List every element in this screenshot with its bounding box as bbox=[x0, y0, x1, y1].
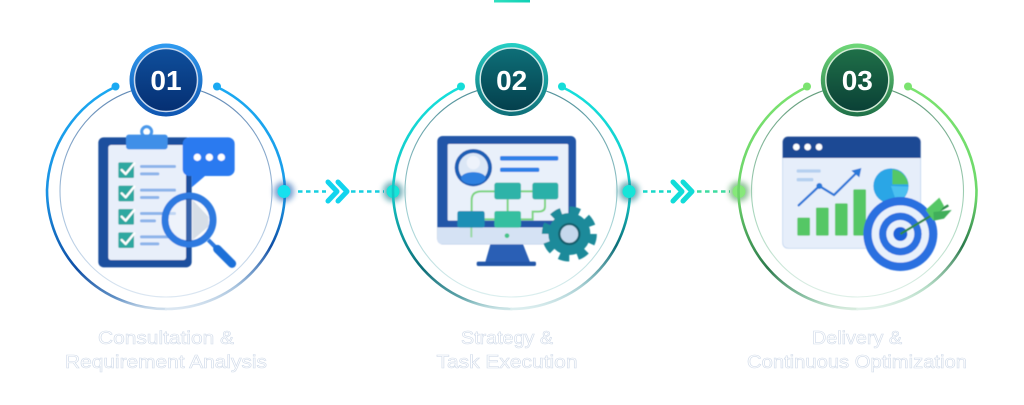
label: step 2 bbox=[436, 328, 578, 372]
arrow chevrons bbox=[673, 182, 692, 201]
badge 02 bbox=[475, 43, 548, 116]
connector: step 2 to step 3 bbox=[619, 182, 749, 202]
badge 01: 01 bbox=[150, 65, 182, 96]
label: step 3: Delivery & bbox=[812, 328, 902, 348]
outer ring step 3 bbox=[738, 87, 977, 309]
inner ring step 1 bbox=[60, 85, 272, 297]
outer ring step 1 bbox=[47, 87, 285, 309]
icon: analytics window with target bbox=[783, 137, 952, 271]
label: step 2: Strategy & bbox=[461, 328, 553, 348]
badge 03 bbox=[821, 44, 894, 116]
label: step 2: Task Execution bbox=[436, 352, 578, 372]
inner ring step 3 bbox=[752, 85, 964, 297]
inner ring step 2 bbox=[405, 85, 617, 297]
ring end dots step 1 bbox=[112, 82, 221, 90]
badge 03: 03 bbox=[842, 65, 873, 96]
panel: step 1 bbox=[47, 44, 285, 309]
ring end dots step 3 bbox=[803, 82, 912, 90]
panel: step 3 bbox=[738, 44, 977, 309]
label: step 1 bbox=[65, 328, 267, 372]
badge 01 bbox=[130, 44, 202, 116]
node right bbox=[729, 182, 749, 202]
label: step 3 bbox=[747, 328, 967, 372]
label: step 1: Consultation & bbox=[98, 328, 234, 348]
top accent bar bbox=[494, 0, 530, 2]
icon: monitor with workflow and gear bbox=[437, 136, 593, 266]
ring end dots step 2 bbox=[457, 82, 566, 90]
node right bbox=[383, 182, 403, 202]
panel: step 2 bbox=[393, 43, 630, 309]
label: step 3: Continuous Optimization bbox=[747, 352, 967, 372]
icon: clipboard with checklist, speech bubble and magnifier bbox=[98, 127, 235, 267]
outer ring step 2 bbox=[393, 87, 630, 309]
arrow chevrons bbox=[328, 182, 347, 201]
label: step 1: Requirement Analysis bbox=[65, 352, 267, 372]
node left bbox=[274, 182, 294, 202]
node left bbox=[619, 182, 639, 202]
connector: step 1 to step 2 bbox=[274, 182, 403, 202]
badge 02: 02 bbox=[496, 65, 527, 96]
